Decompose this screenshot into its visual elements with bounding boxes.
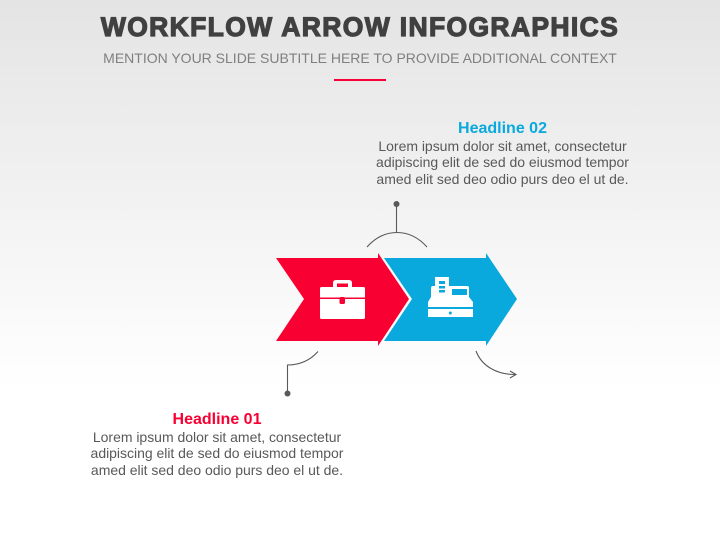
- body text 01: [91, 429, 344, 478]
- body text 01: Lorem ipsum dolor sit amet, consectetur: [93, 429, 341, 445]
- body text 01: adipiscing elit de sed do eiusmod tempor: [91, 445, 343, 461]
- connector: exit arrow: [476, 351, 516, 378]
- text block: headline 01: [91, 411, 344, 478]
- headline 02: Headline 02: [458, 120, 547, 137]
- text block: headline 02: [376, 120, 629, 187]
- title accent rule: [334, 79, 386, 81]
- body text 02: amed elit sed deo odio purs deo el ut de.: [376, 171, 629, 187]
- icon: briefcase: [320, 280, 365, 319]
- body text 02: Lorem ipsum dolor sit amet, consectetur: [378, 138, 627, 154]
- headline 01: Headline 01: [173, 411, 261, 428]
- arrow 2: blue: [384, 253, 517, 346]
- connector: top arc with dot: [367, 201, 427, 247]
- body text 02: adipiscing elit de sed do eiusmod tempor: [376, 154, 629, 170]
- body text 02: [376, 138, 629, 187]
- arrow 1: red: [276, 253, 409, 346]
- subtitle: MENTION YOUR SLIDE SUBTITLE HERE TO PROVIDE ADDITIONAL CONTEXT: [103, 50, 617, 66]
- connector: bottom left with dot: [284, 352, 318, 396]
- body text 01: amed elit sed deo odio purs deo el ut de.: [91, 462, 343, 478]
- title: WORKFLOW ARROW INFOGRAPHICS: [101, 12, 619, 42]
- icon: cash register: [428, 277, 473, 317]
